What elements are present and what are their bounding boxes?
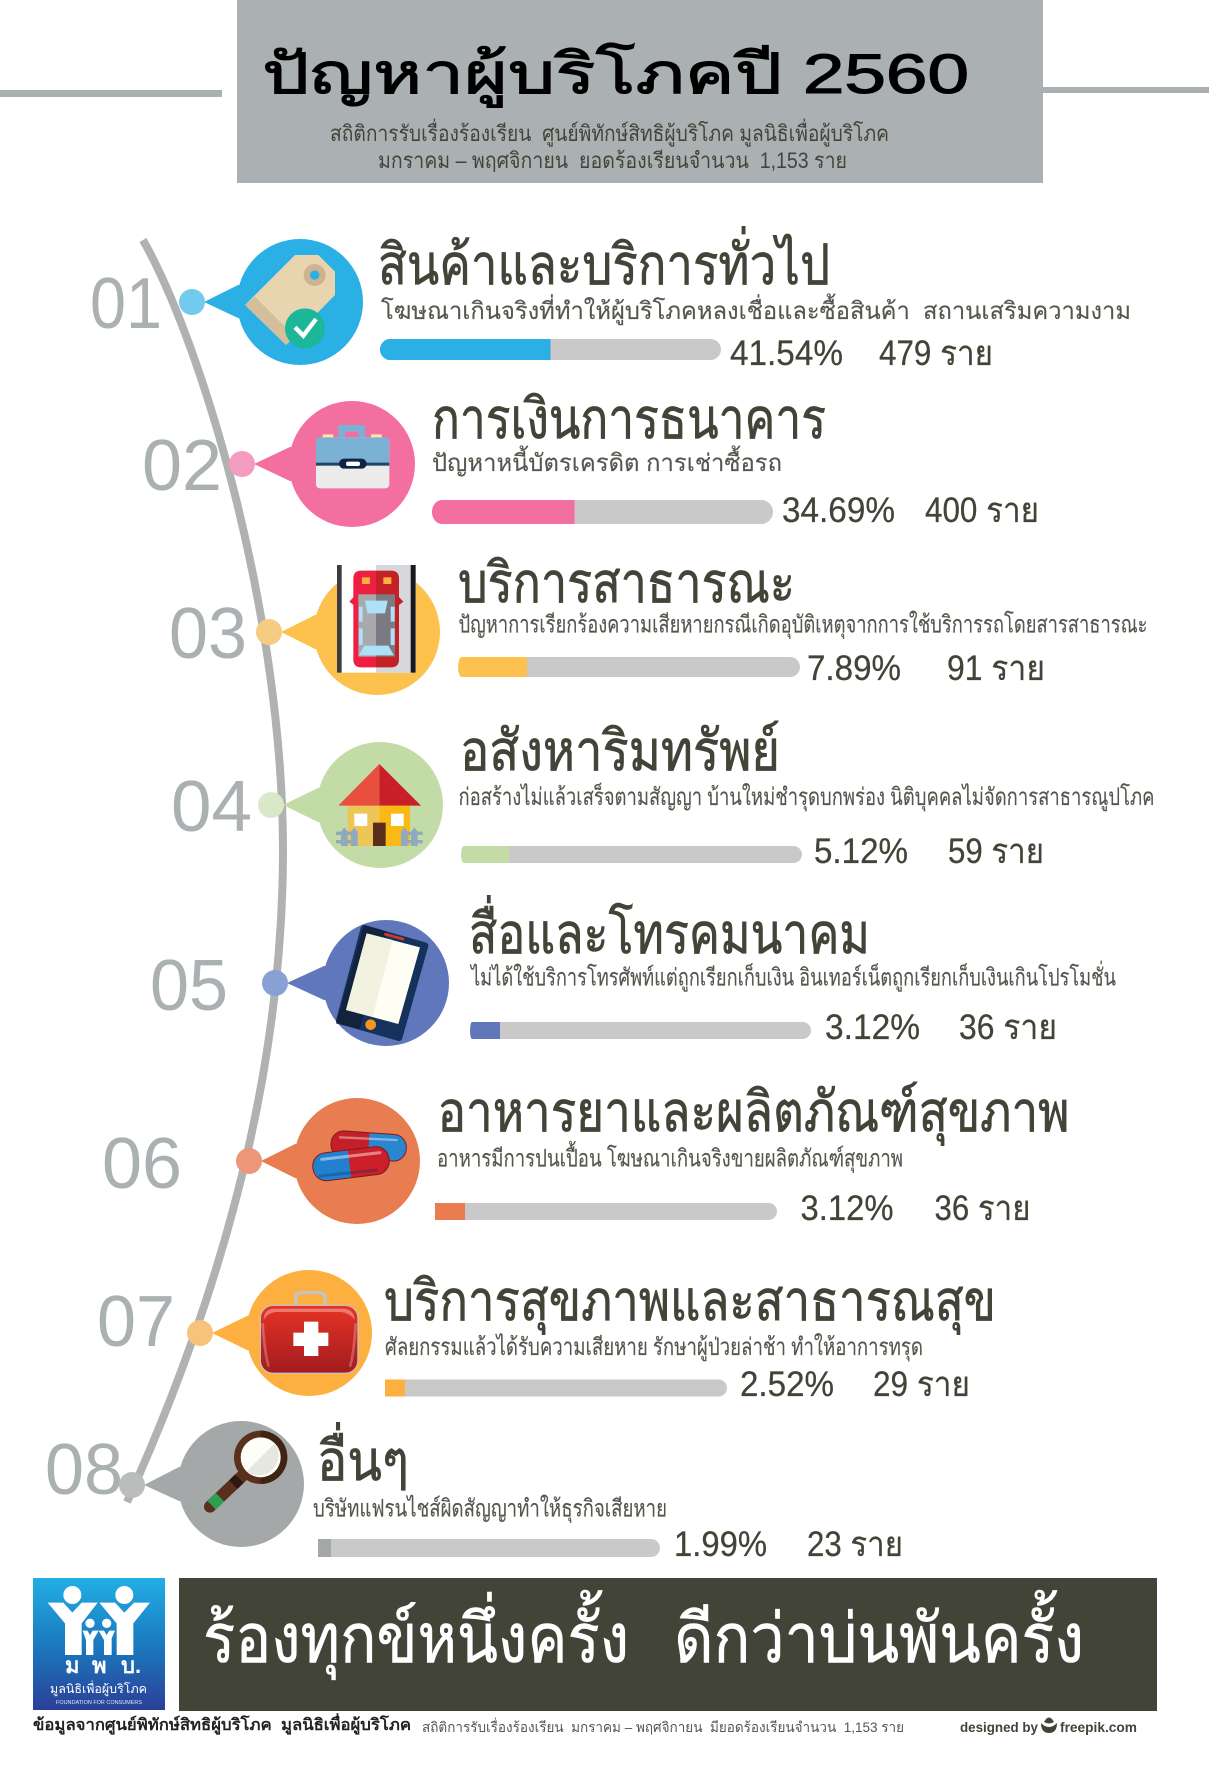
number 07: 07 — [97, 1282, 175, 1362]
count 08: 23 ราย — [807, 1525, 903, 1564]
marker 08 — [119, 1421, 304, 1547]
panel: item 03 — [169, 551, 1148, 695]
bar 06 — [435, 1203, 777, 1220]
bar 07 — [385, 1380, 727, 1396]
percentage 08: 1.99% — [674, 1525, 767, 1564]
panel: item 01 — [90, 226, 1131, 373]
logo: foundation for consumers: มูลนิธิเพื่อผู้บริโภค — [50, 1680, 147, 1697]
percentage 02: 34.69% — [782, 491, 895, 530]
marker 06 — [236, 1098, 420, 1224]
count 01: 479 ราย — [879, 334, 993, 373]
percentage 04: 5.12% — [814, 832, 908, 871]
marker 03 — [256, 569, 440, 695]
panel: item 08 — [45, 1421, 903, 1564]
logo: foundation for consumers: FOUNDATION FOR CONSUMERS — [56, 1700, 143, 1706]
number 08: 08 — [45, 1430, 123, 1510]
header decorative rule left — [0, 90, 222, 97]
logo: foundation for consumers — [33, 1578, 165, 1710]
number 03: 03 — [169, 594, 247, 674]
marker 02 — [229, 401, 415, 527]
banner: ร้องทุกข์หนึ่งครั้ง — [203, 1590, 629, 1680]
footer credit: freepik.com — [1060, 1719, 1137, 1735]
marker 01 — [179, 239, 363, 365]
number 05: 05 — [150, 946, 228, 1026]
heading 01: สินค้าและบริการทั่วไป — [378, 226, 830, 296]
description 06: อาหารมีการปนเปื้อน โฆษณาเกินจริงขายผลิตภัณฑ์สุขภาพ — [437, 1140, 903, 1174]
timeline curve — [127, 240, 283, 1502]
number 01: 01 — [90, 264, 162, 344]
logo: foundation for consumers: ม — [65, 1653, 80, 1678]
panel: item 04 — [171, 719, 1154, 871]
bar 01 — [380, 339, 721, 360]
bar 04 — [461, 846, 802, 863]
heading 05: สื่อและโทรคมนาคม — [469, 895, 870, 965]
footer source bold: ข้อมูลจากศูนย์พิทักษ์สิทธิผู้บริโภค มูลนิธิเพื่อผู้บริโภค — [33, 1713, 411, 1736]
bar 05 — [470, 1022, 811, 1039]
number 06: 06 — [102, 1124, 182, 1204]
icon: first aid kit — [260, 1293, 358, 1373]
banner: ดีกว่าบ่นพันครั้ง — [674, 1590, 1084, 1677]
panel: item 07 — [97, 1269, 996, 1404]
panel: item 06 — [102, 1080, 1070, 1228]
count 03: 91 ราย — [947, 649, 1045, 688]
marker 07 — [187, 1270, 372, 1396]
panel: item 02 — [142, 387, 1039, 530]
count 02: 400 ราย — [925, 491, 1039, 530]
number 02: 02 — [142, 426, 222, 506]
banner — [179, 1578, 1157, 1711]
marker 04 — [258, 742, 443, 868]
description 01: โฆษณาเกินจริงที่ทำให้ผู้บริโภคหลงเชื่อและซื้อสินค้า สถานเสริมความงาม — [381, 293, 1131, 326]
number 04: 04 — [171, 767, 252, 847]
panel: header — [237, 0, 1043, 183]
icon: tablet — [336, 925, 425, 1038]
count 06: 36 ราย — [934, 1189, 1030, 1228]
subtitle line 2: มกราคม – พฤศจิกายน ยอดร้องเรียนจำนวน 1,153 ราย — [378, 148, 847, 173]
count 05: 36 ราย — [959, 1008, 1057, 1047]
description 07: ศัลยกรรมแล้วได้รับความเสียหาย รักษาผู้ป่วยล่าช้า ทำให้อาการทรุด — [385, 1333, 923, 1362]
count 04: 59 ราย — [948, 832, 1044, 871]
panel: item 05 — [150, 895, 1116, 1047]
heading 06: อาหารยาและผลิตภัณฑ์สุขภาพ — [438, 1080, 1070, 1146]
percentage 05: 3.12% — [825, 1008, 920, 1047]
logo: foundation for consumers: บ. — [121, 1653, 141, 1678]
percentage 07: 2.52% — [740, 1365, 834, 1404]
heading 03: บริการสาธารณะ — [458, 551, 795, 614]
title: ปัญหาผู้บริโภคปี 2560 — [262, 42, 969, 108]
description 08: บริษัทแฟรนไชส์ผิดสัญญาทำให้ธุรกิจเสียหาย — [313, 1494, 667, 1524]
marker 05 — [262, 920, 449, 1046]
bar 03 — [458, 657, 800, 677]
heading 07: บริการสุขภาพและสาธารณสุข — [384, 1269, 996, 1335]
footer statistic note: สถิติการรับเรื่องร้องเรียน มกราคม – พฤศจิกายน มียอดร้องเรียนจำนวน 1,153 ราย — [422, 1718, 904, 1735]
header decorative rule right — [1043, 87, 1209, 93]
subtitle line 1: สถิติการรับเรื่องร้องเรียน ศูนย์พิทักษ์สิทธิผู้บริโภค มูลนิธิเพื่อผู้บริโภค — [330, 118, 889, 147]
percentage 06: 3.12% — [800, 1189, 894, 1228]
heading 04: อสังหาริมทรัพย์ — [460, 719, 780, 782]
icon: house — [336, 764, 423, 846]
icon: price tag with check — [245, 255, 335, 348]
count 07: 29 ราย — [873, 1365, 970, 1404]
heading 02: การเงินการธนาคาร — [432, 387, 826, 450]
footer credit: designed by — [960, 1719, 1038, 1735]
description 02: ปัญหาหนี้บัตรเครดิต การเช่าซื้อรถ — [432, 445, 782, 477]
logo: foundation for consumers: พ — [92, 1653, 107, 1678]
heading 08: อื่นๆ — [317, 1422, 409, 1492]
icon: magnifying glass — [210, 1431, 287, 1507]
icon: briefcase — [316, 428, 389, 488]
icon: capsules — [311, 1130, 407, 1182]
percentage 03: 7.89% — [807, 649, 901, 688]
bar 02 — [432, 500, 773, 524]
bar 08 — [318, 1539, 660, 1557]
icon: car on road — [337, 565, 416, 673]
percentage 01: 41.54% — [730, 334, 843, 373]
footer credit — [960, 1718, 1137, 1735]
